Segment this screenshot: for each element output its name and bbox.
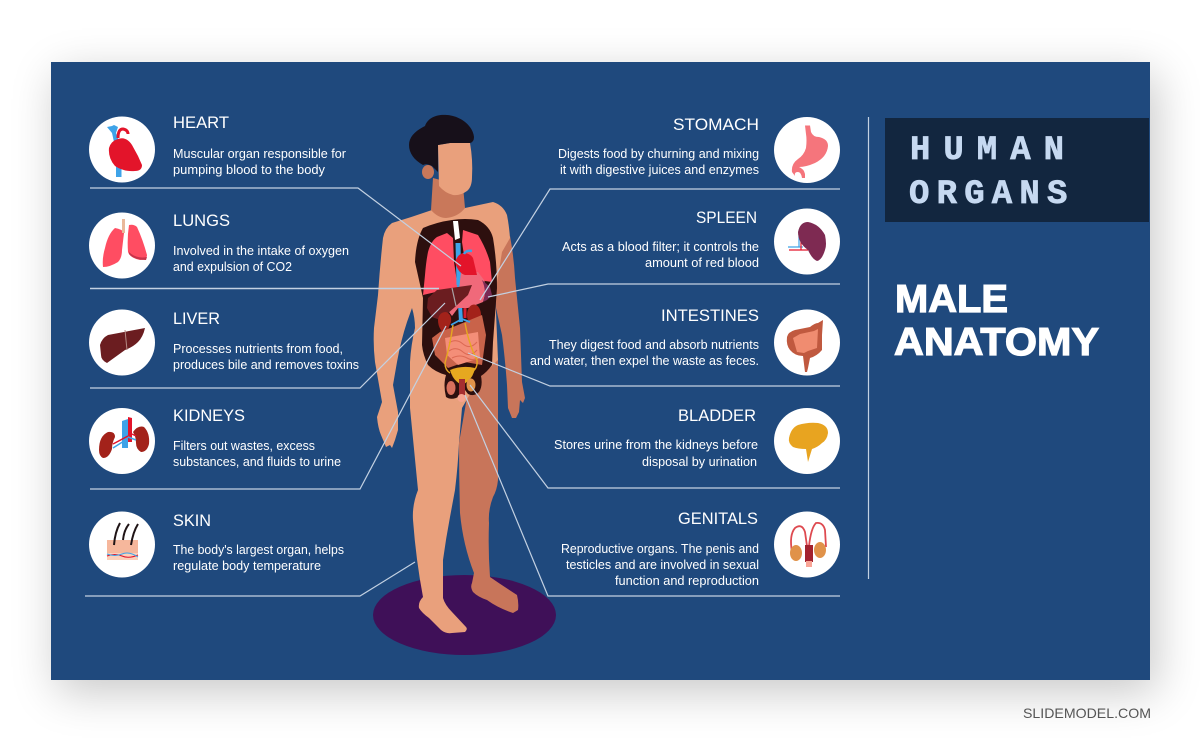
icon: kidneys: [89, 408, 155, 474]
heading: stomach: STOMACH: [673, 115, 759, 134]
heading: genitals: GENITALS: [678, 509, 758, 528]
description: spleen: [562, 240, 759, 270]
icon: bladder: [774, 408, 840, 474]
spleen: [482, 280, 492, 302]
description: kidneys: substances, and fluids to urine: [173, 455, 341, 469]
subtitle: male anatomy: [894, 278, 1099, 364]
description: heart: Muscular organ responsible for: [173, 147, 346, 161]
description: stomach: [558, 147, 759, 177]
floor ellipse: [373, 575, 556, 655]
source credit: SLIDEMODEL.COM: [1023, 705, 1151, 721]
title: human organs: HUMAN: [910, 132, 1077, 170]
penis: [459, 379, 465, 396]
right leg in shade: [459, 358, 518, 613]
icon: stomach: [774, 117, 840, 183]
right arm in shade: [494, 236, 525, 418]
callout: bladder: [554, 406, 840, 474]
heart: [455, 253, 477, 275]
description: lungs: Involved in the intake of oxygen: [173, 244, 349, 258]
callout: spleen: [562, 208, 840, 274]
leader lines: [85, 188, 840, 596]
heading: intestines: INTESTINES: [661, 306, 759, 325]
heading: bladder: BLADDER: [678, 406, 756, 425]
icon: genitals: [774, 512, 840, 578]
heading: spleen: SPLEEN: [696, 208, 757, 227]
callout: heart: [89, 113, 346, 182]
icon: spleen: [774, 208, 840, 274]
heading: lungs: LUNGS: [173, 211, 230, 230]
description: skin: regulate body temperature: [173, 559, 321, 573]
description: bladder: disposal by urination: [642, 455, 757, 469]
description: genitals: [561, 542, 759, 588]
icon: heart: [89, 116, 155, 182]
description: heart: [173, 147, 346, 177]
description: genitals: Reproductive organs. The penis and: [561, 542, 759, 556]
heading: liver: LIVER: [173, 309, 220, 328]
ear: [422, 165, 434, 179]
intestines: [432, 315, 486, 368]
description: lungs: and expulsion of CO2: [173, 260, 292, 274]
description: liver: produces bile and removes toxins: [173, 358, 359, 372]
liver: [427, 285, 472, 320]
vertical divider: [868, 117, 870, 579]
description: bladder: Stores urine from the kidneys before: [554, 438, 758, 452]
callout: kidneys: [89, 406, 341, 474]
torso, left arm and left leg: [374, 202, 510, 633]
description: spleen: Acts as a blood filter; it controls the: [562, 240, 759, 254]
description: bladder: [554, 438, 758, 469]
description: intestines: and water, then expel the waste as feces.: [530, 354, 759, 368]
description: heart: pumping blood to the body: [173, 163, 326, 177]
description: kidneys: [173, 439, 341, 469]
description: stomach: it with digestive juices and enzymes: [560, 163, 759, 177]
description: kidneys: Filters out wastes, excess: [173, 439, 315, 453]
callout: skin: [89, 511, 344, 578]
icon: skin: [89, 512, 155, 578]
subtitle: male anatomy: MALE: [895, 278, 1008, 321]
description: spleen: amount of red blood: [645, 256, 759, 270]
description: intestines: They digest food and absorb nutrients: [549, 338, 759, 352]
aorta and vena cava: [458, 243, 465, 322]
stomach: [449, 272, 487, 316]
callout: lungs: [89, 211, 349, 278]
title: human organs: ORGANS: [909, 176, 1075, 214]
description: liver: Processes nutrients from food,: [173, 342, 343, 356]
heading: kidneys: KIDNEYS: [173, 406, 245, 425]
description: skin: The body's largest organ, helps: [173, 543, 344, 557]
description: genitals: function and reproduction: [615, 574, 759, 588]
icon: intestines: [774, 310, 840, 376]
face: [438, 143, 472, 195]
description: genitals: testicles and are involved in sexual: [566, 558, 759, 572]
description: liver: [173, 342, 359, 372]
icon: lungs: [89, 212, 155, 278]
lungs: [423, 230, 492, 295]
callout: intestines: [530, 306, 840, 376]
body cavity: [415, 219, 497, 399]
callout: liver: [89, 309, 359, 376]
ureters: [445, 323, 477, 373]
trachea: [453, 221, 460, 240]
callout: stomach: [558, 115, 840, 183]
heading: heart: HEART: [173, 113, 229, 132]
icon: liver: [89, 310, 155, 376]
title box: [885, 118, 1149, 222]
description: intestines: [530, 338, 759, 368]
hair: [409, 115, 474, 172]
heading: skin: SKIN: [173, 511, 211, 530]
callout: genitals: [561, 509, 840, 588]
kidneys: [438, 312, 451, 336]
neck: [431, 178, 465, 218]
testicles: [446, 381, 456, 395]
human figure: [374, 115, 525, 633]
subtitle: male anatomy: ANATOMY: [894, 321, 1099, 364]
description: stomach: Digests food by churning and mixing: [558, 147, 759, 161]
description: lungs: [173, 244, 349, 274]
bladder: [450, 367, 475, 385]
renal vessels: [451, 319, 470, 325]
description: skin: [173, 543, 344, 573]
slide panel background: [51, 62, 1150, 680]
title: human organs: [909, 132, 1077, 214]
